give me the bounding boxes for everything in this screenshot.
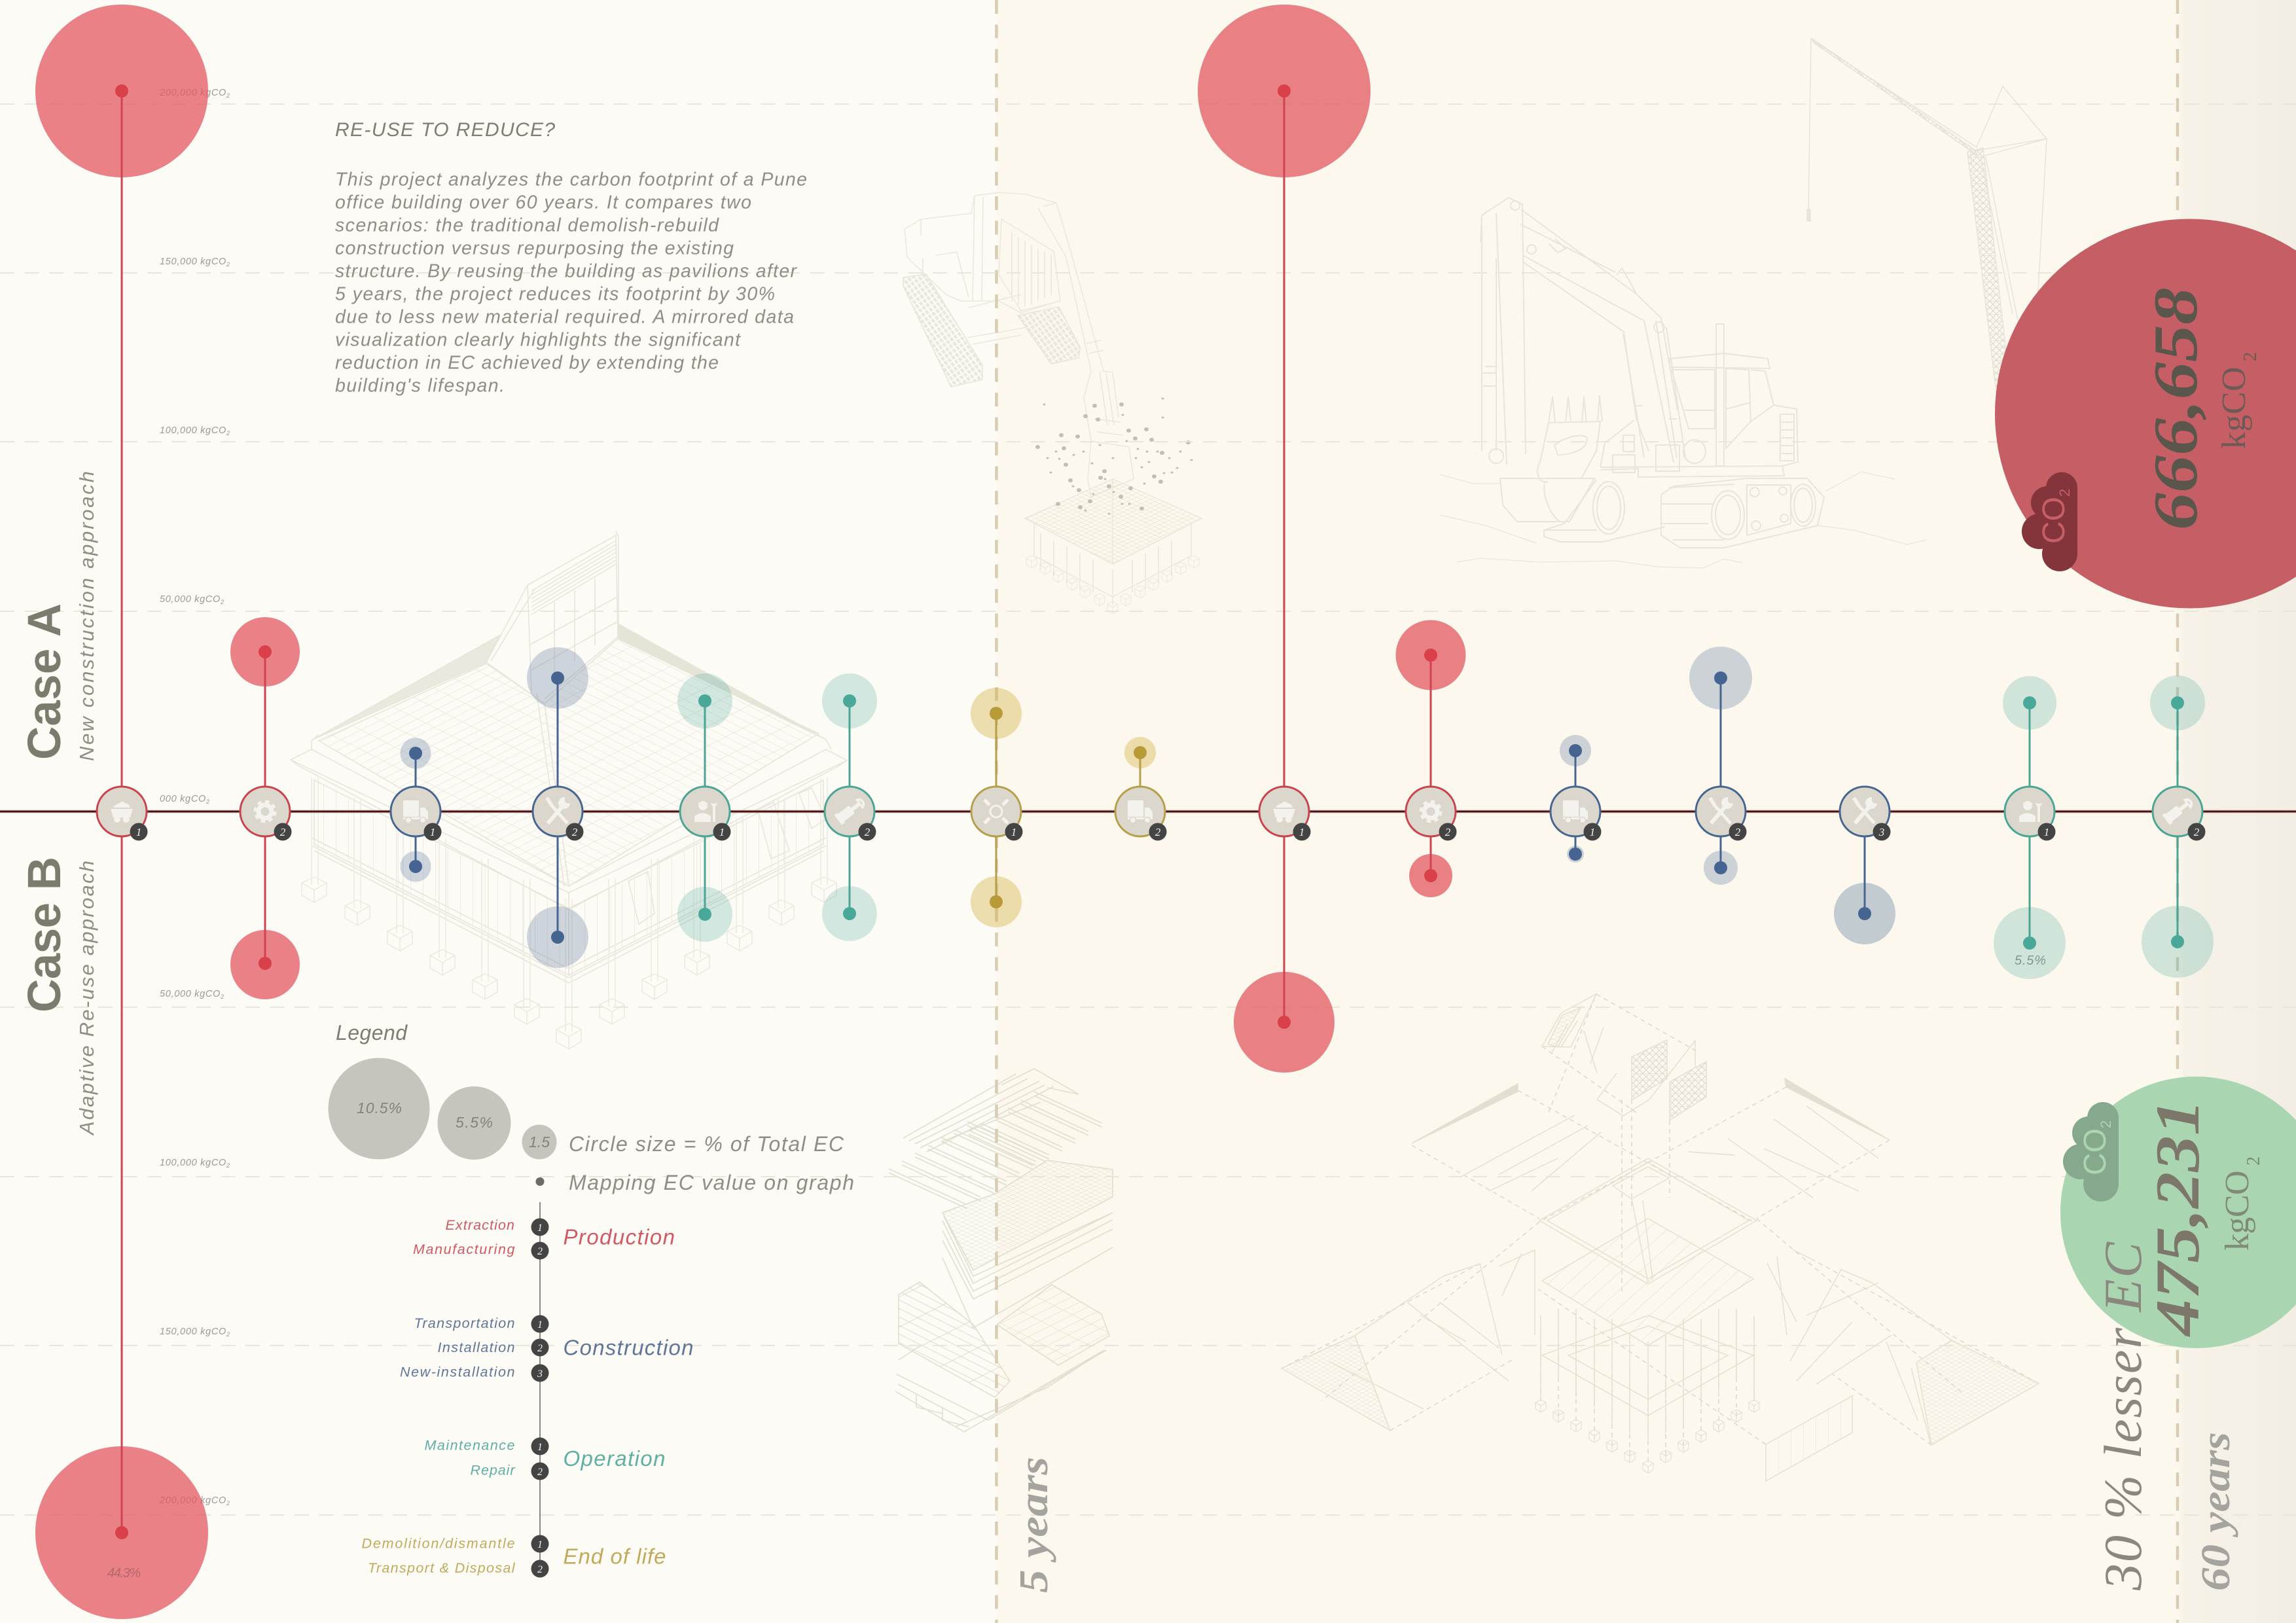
data: installation	[527, 647, 588, 968]
time marker: 60 years dashed line	[2176, 0, 2179, 1623]
axis scale labels	[159, 88, 230, 1507]
intro text block: construction versus repurposing the existing	[335, 238, 734, 259]
node: installation: 2	[572, 826, 578, 838]
axis scale labels: 50,000 kgCO	[160, 989, 220, 999]
node: disposal: 2	[1155, 826, 1161, 838]
intro text block: reduction in EC achieved by extending the	[335, 352, 719, 373]
legend circle: 10.5%: 10.5%	[357, 1099, 402, 1116]
axis scale labels: 2	[226, 1162, 230, 1169]
data: maintenance second cycle: 5.5%	[2015, 954, 2046, 968]
legend spine with numbered badges: 2	[537, 1343, 543, 1354]
legend group: end of life: Transport & Disposal	[368, 1560, 516, 1576]
data: repair	[822, 673, 877, 941]
axis scale labels: 150,000 kgCO	[160, 1327, 226, 1337]
node: manufacturing	[240, 787, 292, 840]
data: manufacturing second cycle	[1395, 620, 1466, 897]
axis scale labels: 000 kgCO	[160, 794, 206, 804]
legend group: production	[413, 1217, 675, 1257]
data: maintenance second cycle	[1994, 676, 2066, 979]
legend spine with numbered badges: 1	[537, 1539, 543, 1550]
data: new-installation	[1834, 812, 1895, 944]
legend circle: 1.5	[522, 1124, 556, 1160]
legend group: end of life	[361, 1535, 666, 1576]
legend heading: Legend	[336, 1021, 408, 1044]
unit: kgCO2: kgCO	[2215, 366, 2253, 449]
legend circle: 5.5%: 5.5%	[456, 1114, 493, 1131]
legend group: operation	[424, 1437, 665, 1478]
heading: Case B: Case B	[19, 857, 71, 1012]
legend group: production: Manufacturing	[413, 1241, 515, 1257]
node: repair second cycle: 2	[2194, 826, 2200, 838]
node: extraction	[97, 787, 148, 840]
legend circle: 5.5%	[437, 1086, 511, 1160]
node: extraction second cycle: 1	[1299, 826, 1304, 838]
illustration: exploded layer stack	[889, 1069, 1113, 1432]
node: installation	[533, 787, 584, 840]
unit: kgCO2: 2	[2240, 352, 2261, 361]
node: manufacturing second cycle	[1406, 787, 1457, 840]
data: manufacturing	[230, 617, 300, 999]
small building roof	[1025, 479, 1202, 564]
node: transportation second cycle: 1	[1590, 826, 1595, 838]
axis scale labels: 2	[226, 1331, 230, 1338]
data: installation second cycle	[1689, 647, 1752, 885]
intro text block: This project analyzes the carbon footprint of a Pune	[335, 169, 807, 190]
legend spine with numbered badges: 1	[537, 1442, 543, 1453]
axis scale labels: 2	[226, 261, 230, 268]
heading: Case A: Case A	[19, 603, 71, 760]
icon: CO2 cloud red: CO	[2037, 497, 2072, 544]
intro text block: 5 years, the project reduces its footprint by 30%	[335, 284, 775, 305]
node: repair: 2	[865, 826, 870, 838]
axis scale labels: 100,000 kgCO	[160, 1158, 226, 1168]
data: extraction second cycle	[1198, 5, 1371, 1073]
total circle: case B	[2060, 1077, 2296, 1348]
background: left pale panel	[0, 0, 997, 1623]
node: repair	[825, 787, 876, 840]
time marker: 5 years dashed line	[995, 0, 998, 1623]
callout: 30% lesser EC: 30 % lesser EC	[2093, 1241, 2153, 1591]
data: repair second cycle	[2142, 675, 2214, 978]
legend group: construction	[400, 1315, 694, 1380]
data: maintenance	[677, 673, 732, 942]
legend group: construction: Transportation	[414, 1315, 514, 1331]
axis scale labels: 2	[226, 92, 230, 99]
title: RE-USE TO REDUCE?	[335, 119, 555, 141]
data: extraction new and re-use	[35, 5, 208, 1619]
illustration: isometric building	[291, 531, 847, 1049]
axis scale labels: 2	[220, 993, 224, 1000]
legend group: end of life: Demolition/dismantle	[361, 1535, 515, 1551]
label: 5 years: 5 years	[1011, 1457, 1056, 1593]
illustration: side-view excavator	[1440, 198, 1926, 568]
axis scale labels: 150,000 kgCO	[160, 257, 226, 267]
intro text block	[335, 169, 807, 397]
legend spine with numbered badges: 3	[537, 1368, 543, 1380]
intro text block: building's lifespan.	[335, 376, 505, 397]
axis scale labels: 200,000 kgCO	[160, 88, 226, 98]
icon: CO2 cloud red	[2022, 473, 2077, 571]
data: demolition	[971, 688, 1022, 927]
legend group: construction: Construction	[563, 1335, 694, 1360]
icon: CO2 cloud red: 2	[2056, 489, 2073, 497]
node: transportation second cycle	[1551, 787, 1601, 840]
legend group: operation: Maintenance	[424, 1437, 515, 1453]
node: new-installation	[1840, 787, 1890, 840]
legend dot	[535, 1177, 545, 1186]
axis scale labels: 2	[226, 1500, 230, 1507]
node: maintenance second cycle: 1	[2044, 826, 2049, 838]
legend note: circle size: Circle size = % of Total EC	[569, 1132, 844, 1156]
illustration: crane	[1807, 38, 2047, 393]
icon: CO2 cloud green: 2	[2098, 1120, 2114, 1128]
node: maintenance second cycle	[2005, 787, 2055, 840]
legend group: construction: New-installation	[400, 1364, 514, 1380]
value: 475,231: 475,231	[2144, 1099, 2212, 1337]
node: demolition: 1	[1011, 826, 1016, 838]
legend group: operation: Repair	[470, 1462, 515, 1478]
legend spine with numbered badges: 1	[537, 1319, 543, 1330]
axis scale labels: 2	[206, 798, 209, 805]
axis scale labels: 100,000 kgCO	[160, 425, 226, 436]
data: disposal	[1124, 737, 1156, 812]
legend group: operation: Operation	[563, 1446, 665, 1471]
illustration: rubble	[1037, 399, 1192, 514]
intro text block: scenarios: the traditional demolish-rebuild	[335, 215, 719, 236]
node: maintenance: 1	[719, 826, 725, 838]
legend spine with numbered badges: 2	[537, 1467, 543, 1478]
legend spine with numbered badges: 1	[537, 1222, 543, 1234]
intro text block: structure. By reusing the building as pavilions after	[335, 260, 797, 281]
icon: CO2 cloud green	[2063, 1102, 2119, 1202]
data: extraction new and re-use: 44.3%	[107, 1566, 141, 1580]
node: demolition	[971, 787, 1022, 840]
background: right 60-year band	[2178, 0, 2296, 1623]
legend spine with numbered badges: 2	[537, 1246, 543, 1257]
legend group: end of life: End of life	[563, 1544, 666, 1568]
label: 60 years: 60 years	[2194, 1432, 2238, 1591]
data: transportation	[401, 738, 431, 882]
node: installation second cycle: 2	[1735, 826, 1741, 838]
subheading: New construction approach: New construction approach	[75, 471, 98, 761]
legend circle: 10.5%	[329, 1058, 429, 1160]
node: maintenance	[680, 787, 730, 840]
background: middle cream panel	[997, 0, 2178, 1623]
value: 666,658: 666,658	[2141, 287, 2210, 530]
axis scale labels: 50,000 kgCO	[160, 594, 220, 605]
illustration: demolition excavator	[903, 192, 1202, 614]
node: transportation	[391, 787, 441, 840]
legend	[329, 1021, 854, 1577]
node: extraction second cycle	[1259, 787, 1310, 840]
node: installation second cycle	[1696, 787, 1746, 840]
icon: CO2 cloud green: CO	[2078, 1128, 2113, 1175]
subheading: Adaptive Re-use approach: Adaptive Re-use approach	[75, 861, 98, 1136]
legend spine with numbered badges	[531, 1202, 548, 1577]
intro text block: visualization clearly highlights the significant	[335, 330, 741, 351]
node: disposal	[1115, 787, 1166, 840]
axis scale labels: 2	[220, 599, 224, 605]
node: new-installation: 3	[1878, 826, 1884, 838]
intro text block: office building over 60 years. It compares two	[335, 192, 751, 213]
legend group: construction: Installation	[437, 1340, 514, 1355]
node: manufacturing: 2	[280, 826, 286, 838]
axis scale labels: 200,000 kgCO	[160, 1495, 226, 1506]
data: transportation second cycle	[1560, 735, 1591, 863]
total circle: case A	[1995, 219, 2296, 609]
axis scale labels: 2	[226, 430, 230, 437]
legend note: mapping: Mapping EC value on graph	[569, 1171, 854, 1194]
node: repair second cycle	[2153, 787, 2206, 840]
legend group: production: Production	[563, 1225, 675, 1249]
intro text block: due to less new material required. A mirrored data	[335, 306, 794, 327]
legend spine with numbered badges: 2	[537, 1564, 543, 1575]
node: transportation: 1	[430, 826, 435, 838]
legend group: production: Extraction	[445, 1217, 514, 1233]
legend circle: 1.5: 1.5	[529, 1133, 550, 1150]
node: manufacturing second cycle: 2	[1445, 826, 1451, 838]
unit: kgCO2: 2	[2244, 1156, 2264, 1166]
node: extraction: 1	[136, 826, 141, 838]
unit: kgCO2: kgCO	[2219, 1170, 2256, 1251]
timeline axis	[0, 810, 2296, 813]
illustration: exploded structure axonometric	[1282, 994, 2039, 1481]
